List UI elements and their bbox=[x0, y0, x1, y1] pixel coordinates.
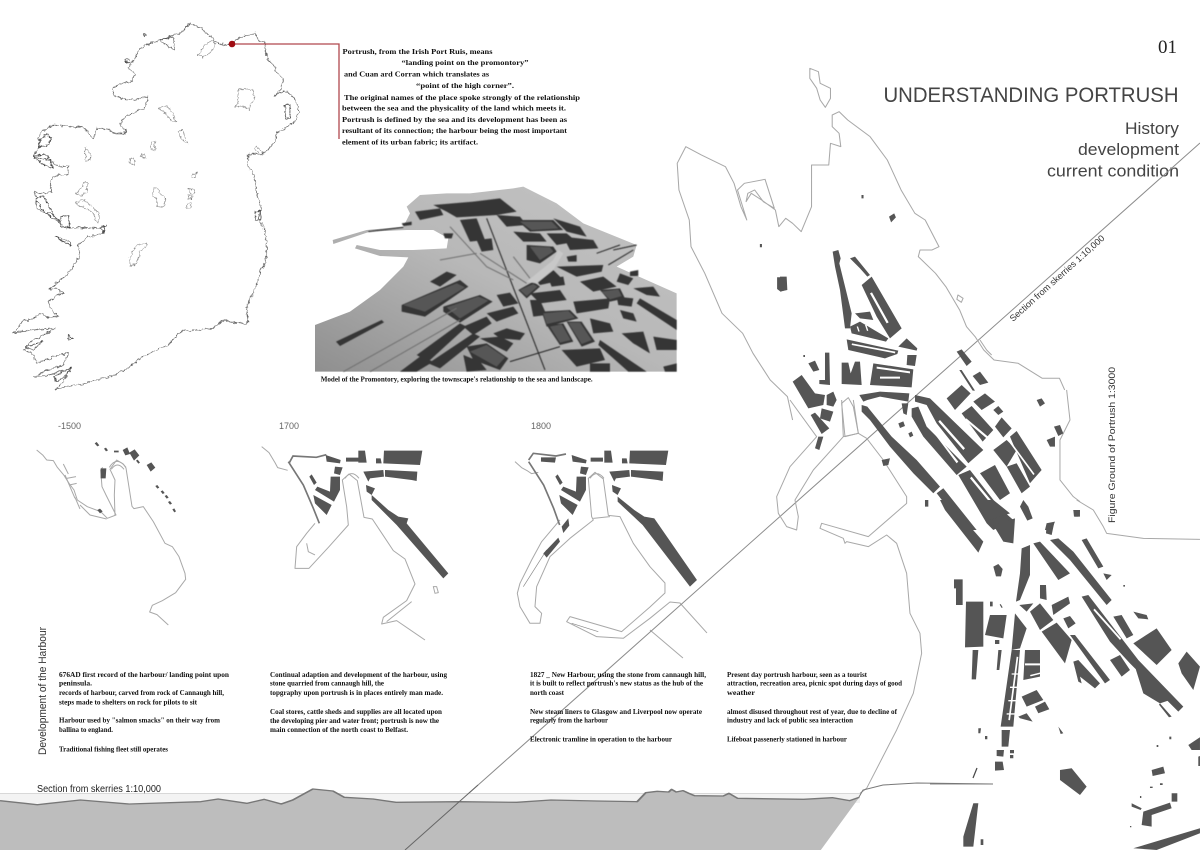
history text: second column: main connection of the north coast to Belfast. bbox=[270, 725, 408, 734]
map: Ireland outline bbox=[13, 23, 298, 390]
text block: meaning of the name Portrush: Portrush, from the Irish Port Ruis, means bbox=[342, 47, 493, 56]
section line bbox=[405, 143, 1200, 850]
history text: first column: steps made to shelters on rock for pilots to sit bbox=[59, 698, 197, 706]
history text: fourth column: attraction, recreation area, picnic spot during days of good bbox=[727, 678, 903, 688]
history text: third column: Electronic tramline in operation to the harbour bbox=[530, 734, 673, 744]
section drawing through the town bbox=[0, 783, 993, 850]
red locator dot and leader line bbox=[229, 41, 339, 139]
history text: first column bbox=[59, 670, 230, 754]
harbour stage: 1800 bbox=[515, 421, 707, 658]
subtitle list bbox=[1047, 119, 1179, 180]
figure ground map: buildings bbox=[780, 250, 1200, 850]
title: UNDERSTANDING PORTRUSH bbox=[884, 84, 1178, 107]
history text: third column: it is built to reflect portrush's new status as the hub of the bbox=[530, 678, 704, 688]
harbour stage: -1500 bbox=[37, 421, 186, 625]
3D model of the promontory bbox=[315, 187, 677, 372]
subtitle list: current condition bbox=[1047, 162, 1179, 180]
history text: fourth column: industry and lack of public sea interaction bbox=[727, 716, 854, 724]
history text: third column bbox=[530, 670, 706, 744]
date label: -1500 bbox=[58, 421, 81, 431]
history text: fourth column: almost disused throughout rest of year, due to decline of bbox=[727, 707, 897, 716]
history text: fourth column: Lifeboat passenerly stationed in harbour bbox=[727, 734, 848, 744]
history text: third column: regularly from the harbour bbox=[530, 716, 609, 724]
text block: meaning of the name Portrush: “landing point on the promontory” bbox=[402, 58, 529, 67]
date label: 1800 bbox=[531, 421, 551, 431]
text block: meaning of the name Portrush: The original names of the place spoke strongly of the relationship bbox=[344, 93, 580, 102]
text block: meaning of the name Portrush: element of its urban fabric; its artifact. bbox=[342, 138, 478, 146]
date label: 1700 bbox=[279, 421, 299, 431]
history text: first column: peninsula. bbox=[59, 678, 92, 688]
harbour stage: 1700 bbox=[262, 421, 448, 640]
text block: meaning of the name Portrush: “point of the high corner”. bbox=[416, 81, 514, 90]
history text: third column: New steam liners to Glasgow and Liverpool now operate bbox=[530, 707, 703, 716]
history text: fourth column: weather bbox=[727, 688, 756, 697]
page number: 01 bbox=[1158, 37, 1177, 58]
figure ground map: coastline bbox=[677, 68, 1200, 793]
history text: fourth column bbox=[727, 670, 903, 744]
history text: second column: the developing pier and water front; portrush is now the bbox=[270, 716, 440, 725]
text block: meaning of the name Portrush: between the sea and the physicality of the land which meets it. bbox=[342, 104, 566, 112]
subtitle list: development bbox=[1078, 140, 1179, 159]
vertical label: development of the harbour: Development of the Harbour bbox=[37, 627, 49, 755]
text block: meaning of the name Portrush: and Cuan ard Corran which translates as bbox=[344, 70, 489, 78]
section drawing label: Section from skerries 1:10,000 bbox=[37, 784, 161, 795]
text block: meaning of the name Portrush: Portrush is defined by the sea and its development has been as bbox=[342, 115, 567, 124]
history text: first column: ballina to england. bbox=[59, 725, 113, 734]
history text: fourth column: Present day portrush harbour, seen as a tourist bbox=[727, 670, 867, 679]
history text: second column: topgraphy upon portrush is in places entirely man made. bbox=[270, 688, 443, 697]
section line label: Section from skerries 1:10,000 bbox=[1008, 233, 1106, 323]
history text: second column: stone quarried from cannaugh hill, the bbox=[270, 678, 385, 688]
history text: second column: Coal stores, cattle sheds and supplies are all located upon bbox=[270, 707, 443, 716]
history text: first column: 676AD first record of the harbour/ landing point upon bbox=[59, 670, 230, 679]
history text: third column: north coast bbox=[530, 688, 564, 697]
figure ground label: Figure Ground of Portrush 1:3000 bbox=[1107, 367, 1118, 523]
text block: meaning of the name Portrush: resultant of its connection; the harbour being the most important bbox=[342, 126, 567, 135]
history text: first column: Harbour used by "salmon smacks" on their way from bbox=[59, 716, 221, 724]
history text: first column: Traditional fishing fleet still operates bbox=[59, 744, 168, 754]
text block: meaning of the name Portrush bbox=[342, 47, 580, 146]
history text: second column: Continual adaption and development of the harbour, using bbox=[270, 670, 447, 679]
section line over ground bbox=[405, 785, 478, 850]
history text: third column: 1827 _ New Harbour, using the stone from cannaugh hill, bbox=[530, 670, 706, 679]
subtitle list: History bbox=[1125, 119, 1179, 138]
history text: first column: records of harbour, carved from rock of Cannaugh hill, bbox=[59, 688, 224, 697]
history text: second column bbox=[270, 670, 447, 734]
model caption: Model of the Promontory, exploring the townscape's relationship to the sea and landscape. bbox=[321, 374, 593, 384]
